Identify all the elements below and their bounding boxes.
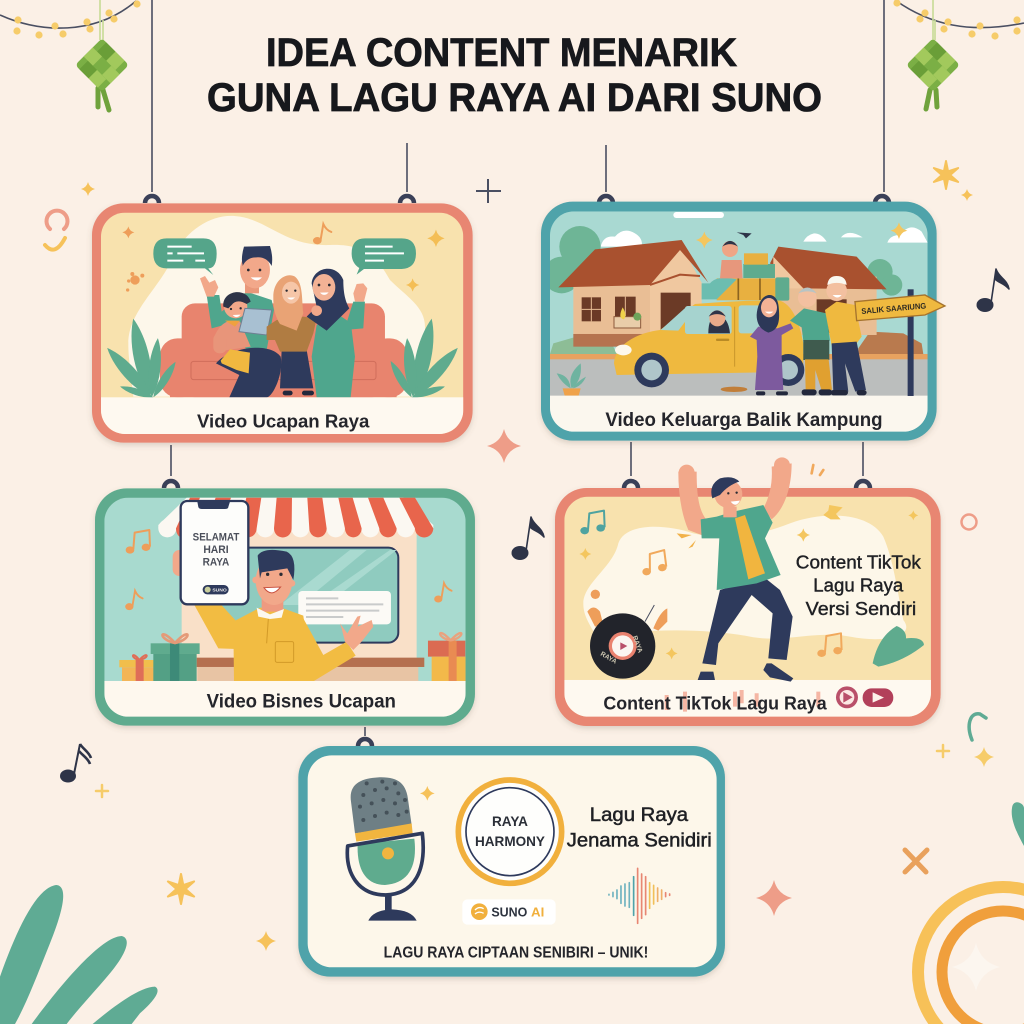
phone [173, 501, 248, 604]
plant and road mark [557, 363, 747, 396]
caption: Video Bisnes Ucapan [207, 692, 396, 713]
badge: Suno AI: SUNO [491, 905, 527, 920]
plants [102, 317, 463, 402]
shopkeeper [194, 550, 373, 682]
leaves and decor [587, 533, 924, 667]
phone: HARI [203, 544, 229, 556]
phone: SUNO [212, 588, 227, 594]
icon: left ketupat [75, 0, 129, 110]
caption: Video Keluarga Balik Kampung [605, 410, 883, 431]
panel: Video Ucapan Raya [92, 203, 473, 443]
text: Content TikTok Lagu Raya Versi Sendiri: Content TikTok [796, 551, 921, 572]
car [614, 301, 804, 387]
decoration: scattered stars and notes [45, 161, 1009, 951]
decoration: right string lights [893, 0, 1024, 40]
clouds and trees [601, 212, 928, 247]
caption: Video Ucapan Raya [197, 410, 370, 431]
icon: right ketupat [906, 0, 960, 109]
awning [158, 498, 433, 538]
note and sparkles [122, 224, 445, 292]
panel: Content TikTok Lagu Raya [555, 457, 941, 726]
text: Content TikTok Lagu Raya Versi Sendiri [796, 551, 921, 619]
phone: RAYA [203, 556, 229, 568]
panel: Lagu Raya Ciptaan Sendiri [298, 746, 725, 977]
sofa [160, 303, 407, 397]
text: Lagu Raya Jenama Senidiri: Lagu Raya [590, 805, 688, 826]
notes and sparkles [580, 511, 605, 534]
family members [750, 276, 867, 395]
left house [558, 240, 708, 347]
logo: Raya Harmony: RAYA [492, 813, 528, 829]
dancing man [678, 457, 823, 682]
shop [182, 528, 417, 682]
text: Lagu Raya Jenama Senidiri: Jenama Senidiri [567, 831, 712, 852]
decoration: left string lights [0, 0, 141, 39]
caption: Content TikTok Lagu Raya [603, 692, 827, 713]
vinyl record: RAYA [631, 635, 643, 654]
logo: Raya Harmony [458, 780, 562, 883]
notes [125, 530, 452, 610]
title: GUNA LAGU RAYA AI DARI SUNO [207, 76, 822, 120]
panel: Video Bisnes Ucapan [95, 488, 475, 726]
panel: Video Keluarga Balik Kampung [541, 202, 945, 441]
caption: LAGU RAYA CIPTAAN SENIBIRI – UNIK! [384, 944, 648, 961]
text: Content TikTok Lagu Raya Versi Sendiri: Lagu Raya [813, 575, 904, 596]
people [200, 246, 367, 397]
right house [770, 247, 887, 335]
phone: SELAMAT [193, 531, 239, 543]
badge: Suno AI [462, 899, 556, 925]
decoration: bottom-left leaves [0, 885, 158, 1024]
gifts [119, 633, 466, 682]
road sign: SALIK SAARIUNG [861, 301, 927, 316]
decoration: bottom-right rings and leaf [918, 802, 1024, 1024]
icon: sound waveform [609, 868, 670, 923]
title [207, 31, 822, 120]
road sign [855, 289, 945, 396]
text: Lagu Raya Jenama Senidiri [567, 805, 712, 852]
vinyl record [590, 613, 655, 679]
logo: Raya Harmony: HARMONY [475, 833, 546, 849]
icon: microphone [347, 777, 435, 921]
text: Content TikTok Lagu Raya Versi Sendiri: Versi Sendiri [806, 598, 916, 619]
title: IDEA CONTENT MENARIK [266, 31, 737, 75]
badge: Suno AI: AI [531, 905, 544, 920]
hanging strings and hooks [145, 0, 889, 746]
speech bubbles [153, 238, 416, 275]
vinyl record: RAYA [599, 651, 618, 666]
icons: play buttons [836, 686, 893, 708]
cargo and passenger on roof [696, 222, 907, 301]
